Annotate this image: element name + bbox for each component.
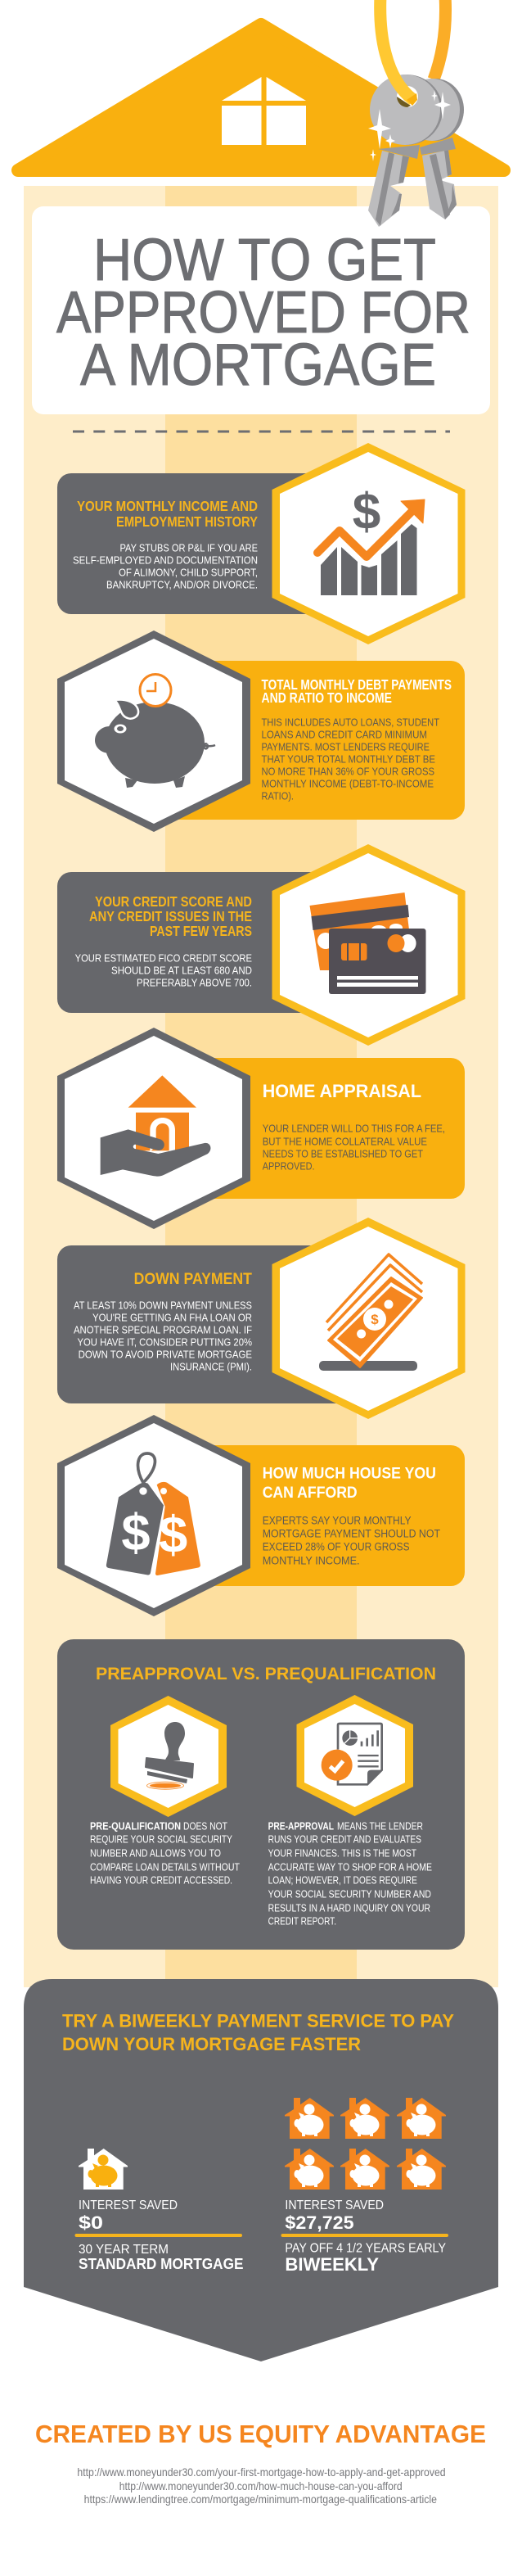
icon: price tags [106,1453,200,1575]
text: monthly debt body [262,717,439,802]
icon: standard mortgage house [79,2149,128,2190]
panel: biweekly payment [24,1979,498,2361]
stat: standard mortgage: STANDARD MORTGAGE [79,2255,244,2272]
text: how much house body: EXCEED 28% OF YOUR GROSS [263,1541,410,1553]
heading: credit score [89,893,252,939]
text: monthly income body: PAY STUBS OR P&L IF YOU ARE [119,542,258,554]
text: home appraisal body: YOUR LENDER WILL DO THIS FOR A FEE, [263,1123,445,1135]
panel: down payment [57,1218,465,1419]
heading: down payment: DOWN PAYMENT [134,1271,252,1288]
icon: hand holding house [101,1075,210,1177]
text: down payment body: ANOTHER SPECIAL PROGRAM LOAN. IF [74,1325,252,1336]
text: down payment body: AT LEAST 10% DOWN PAYMENT UNLESS [74,1300,252,1312]
hexagon: stamp [110,1696,227,1817]
text: monthly debt body: THIS INCLUDES AUTO LOANS, STUDENT [262,717,439,729]
hexagon: report [296,1695,413,1816]
text: monthly debt body: NO MORE THAN 36% OF YOUR GROSS [262,766,434,778]
panel: monthly debt [57,630,465,832]
panel: home appraisal [57,1028,465,1229]
heading: how much house [263,1465,436,1502]
text: pre-qualification: PRE-QUALIFICATION [90,1821,181,1833]
text: home appraisal body: APPROVED. [263,1161,315,1173]
source links: http://www.moneyunder30.com/how-much-house-can-you-afford [119,2479,403,2492]
text: credit score body: YOUR ESTIMATED FICO CREDIT SCORE [75,953,252,965]
stat: biweekly: BIWEEKLY [285,2254,379,2275]
text: how much house body: MONTHLY INCOME. [263,1555,360,1567]
text: monthly income body: BANKRUPTCY, AND/OR DIVORCE. [106,580,258,591]
text: pre-qualification [90,1821,240,1887]
icon: money into slot [319,1254,422,1371]
text: pre-approval: MEANS THE LENDER [337,1821,423,1833]
heading: monthly income: EMPLOYMENT HISTORY [116,513,258,530]
text: down payment body: DOWN TO AVOID PRIVATE MORTGAGE [79,1349,252,1361]
text: how much house body [263,1515,440,1567]
text: monthly debt body: RATIO). [262,791,294,802]
heading: credit score: PAST FEW YEARS [150,923,252,939]
text: pre-qualification: DOES NOT [183,1821,227,1833]
text: pre-approval: RESULTS IN A HARD INQUIRY ON YOUR [268,1903,430,1914]
icon: rising chart with dollar: $ [353,484,380,540]
panel: preapproval vs prequalification [57,1639,465,1950]
hexagon: how much house [57,1415,250,1616]
hexagon: down payment [272,1218,465,1419]
heading: how much house: HOW MUCH HOUSE YOU [263,1465,436,1483]
icon: price tags: $ [121,1504,151,1561]
source links: https://www.lendingtree.com/mortgage/minimum-mortgage-qualifications-article [84,2492,437,2506]
source links [77,2465,446,2506]
text: down payment body [74,1300,252,1372]
heading: credit score: YOUR CREDIT SCORE AND [95,893,252,910]
source links: http://www.moneyunder30.com/your-first-mortgage-how-to-apply-and-get-approved [77,2465,446,2479]
text: monthly debt body: LOANS AND CREDIT CARD MINIMUM [262,729,427,740]
text: pre-approval: PRE-APPROVAL [268,1821,334,1833]
text: credit score body: PREFERABLY ABOVE 700. [137,978,252,989]
text: pre-qualification: NUMBER AND ALLOWS YOU TO [90,1847,221,1859]
dashed divider [73,431,450,432]
text: down payment body: INSURANCE (PMI). [170,1361,252,1372]
text: pre-qualification: REQUIRE YOUR SOCIAL SECURITY [90,1834,232,1846]
panel: monthly income [57,443,465,644]
text: monthly income body: OF ALIMONY, CHILD SUPPORT, [119,567,258,578]
heading: preapproval vs prequalification: PREAPPROVAL VS. PREQUALIFICATION [96,1664,436,1683]
text: monthly income body: SELF-EMPLOYED AND DOCUMENTATION [73,555,258,567]
text: pre-approval [268,1821,432,1927]
heading: monthly debt: TOTAL MONTHLY DEBT PAYMENTS [262,676,452,693]
heading: monthly debt [262,676,452,706]
icon: price tags: $ [159,1507,187,1564]
text: credit score body: SHOULD BE AT LEAST 680 AND [111,965,252,976]
stat: standard mortgage: INTEREST SAVED [79,2199,178,2212]
stat: biweekly: PAY OFF 4 1/2 YEARS EARLY [285,2242,446,2256]
text: monthly income body [73,542,258,591]
roof with window [18,25,504,170]
text: down payment body: YOU HAVE IT, CONSIDER PUTTING 20% [77,1336,252,1348]
text: pre-qualification: HAVING YOUR CREDIT ACCESSED. [90,1875,232,1887]
hexagon: monthly debt [57,630,250,832]
heading: home appraisal: HOME APPRAISAL [263,1081,421,1101]
stat: standard mortgage: 30 YEAR TERM [79,2243,169,2257]
text: credit score body [75,953,252,989]
icon: approved report [322,1724,382,1785]
icon: piggy bank with clock [95,675,215,788]
text: how much house body: MORTGAGE PAYMENT SHOULD NOT [263,1528,440,1540]
heading: biweekly payment: TRY A BIWEEKLY PAYMENT SERVICE TO PAY [62,2011,454,2031]
text: home appraisal body [263,1123,445,1173]
text: pre-approval: YOUR FINANCES. THIS IS THE MOST [268,1847,416,1859]
text: monthly debt body: THAT YOUR TOTAL MONTHLY DEBT BE [262,753,435,765]
footer credit: CREATED BY US EQUITY ADVANTAGE [35,2420,486,2448]
heading: credit score: ANY CREDIT ISSUES IN THE [89,908,252,924]
text: pre-approval: RUNS YOUR CREDIT AND EVALUATES [268,1834,421,1846]
text: how much house body: EXPERTS SAY YOUR MONTHLY [263,1515,412,1527]
stat: standard mortgage: $0 [79,2212,103,2233]
stat: biweekly: INTEREST SAVED [285,2199,384,2212]
panel: credit score [57,844,465,1046]
text: pre-approval: ACCURATE WAY TO SHOP FOR A HOME [268,1862,432,1873]
stat: standard mortgage [75,2199,244,2272]
text: monthly debt body: PAYMENTS. MOST LENDERS REQUIRE [262,742,430,753]
icon: rising chart with dollar [317,484,425,595]
heading: biweekly payment [62,2011,454,2054]
title card [32,206,490,414]
panel: how much house [57,1415,465,1616]
text: pre-approval: LOAN; HOWEVER, IT DOES REQUIRE [268,1875,417,1887]
house body background [24,186,498,1987]
heading: biweekly payment: DOWN YOUR MORTGAGE FASTER [62,2034,361,2054]
icon: money into slot: $ [371,1312,379,1327]
icon: key sparkles [368,90,451,161]
text: pre-approval: CREDIT REPORT. [268,1916,336,1927]
icons: biweekly houses [285,2098,446,2190]
stat: biweekly: $27,725 [285,2212,354,2233]
text: home appraisal body: BUT THE HOME COLLATERAL VALUE [263,1137,427,1148]
heading: monthly income [77,498,258,530]
text: monthly debt body: MONTHLY INCOME (DEBT-TO-INCOME [262,778,434,789]
hexagon: credit score [272,844,465,1046]
heading: how much house: CAN AFFORD [263,1484,358,1502]
heading: monthly income: YOUR MONTHLY INCOME AND [77,498,258,514]
heading: monthly debt: AND RATIO TO INCOME [262,689,392,706]
text: home appraisal body: NEEDS TO BE ESTABLISHED TO GET [263,1148,423,1159]
icon: credit cards [309,893,425,994]
text: pre-approval: YOUR SOCIAL SECURITY NUMBER AND [268,1888,431,1900]
hexagon: monthly income [272,443,465,644]
text: down payment body: YOU'RE GETTING AN FHA LOAN OR [92,1312,252,1323]
stat: biweekly [281,2199,448,2275]
title card: APPROVED FOR [56,280,470,346]
title card: HOW TO GET [93,228,436,293]
title card: A MORTGAGE [80,332,436,398]
text: pre-qualification: COMPARE LOAN DETAILS WITHOUT [90,1862,240,1873]
icon: keys on a ring [368,0,464,227]
hexagon: home appraisal [57,1028,250,1229]
icon: rubber stamp [146,1722,193,1789]
